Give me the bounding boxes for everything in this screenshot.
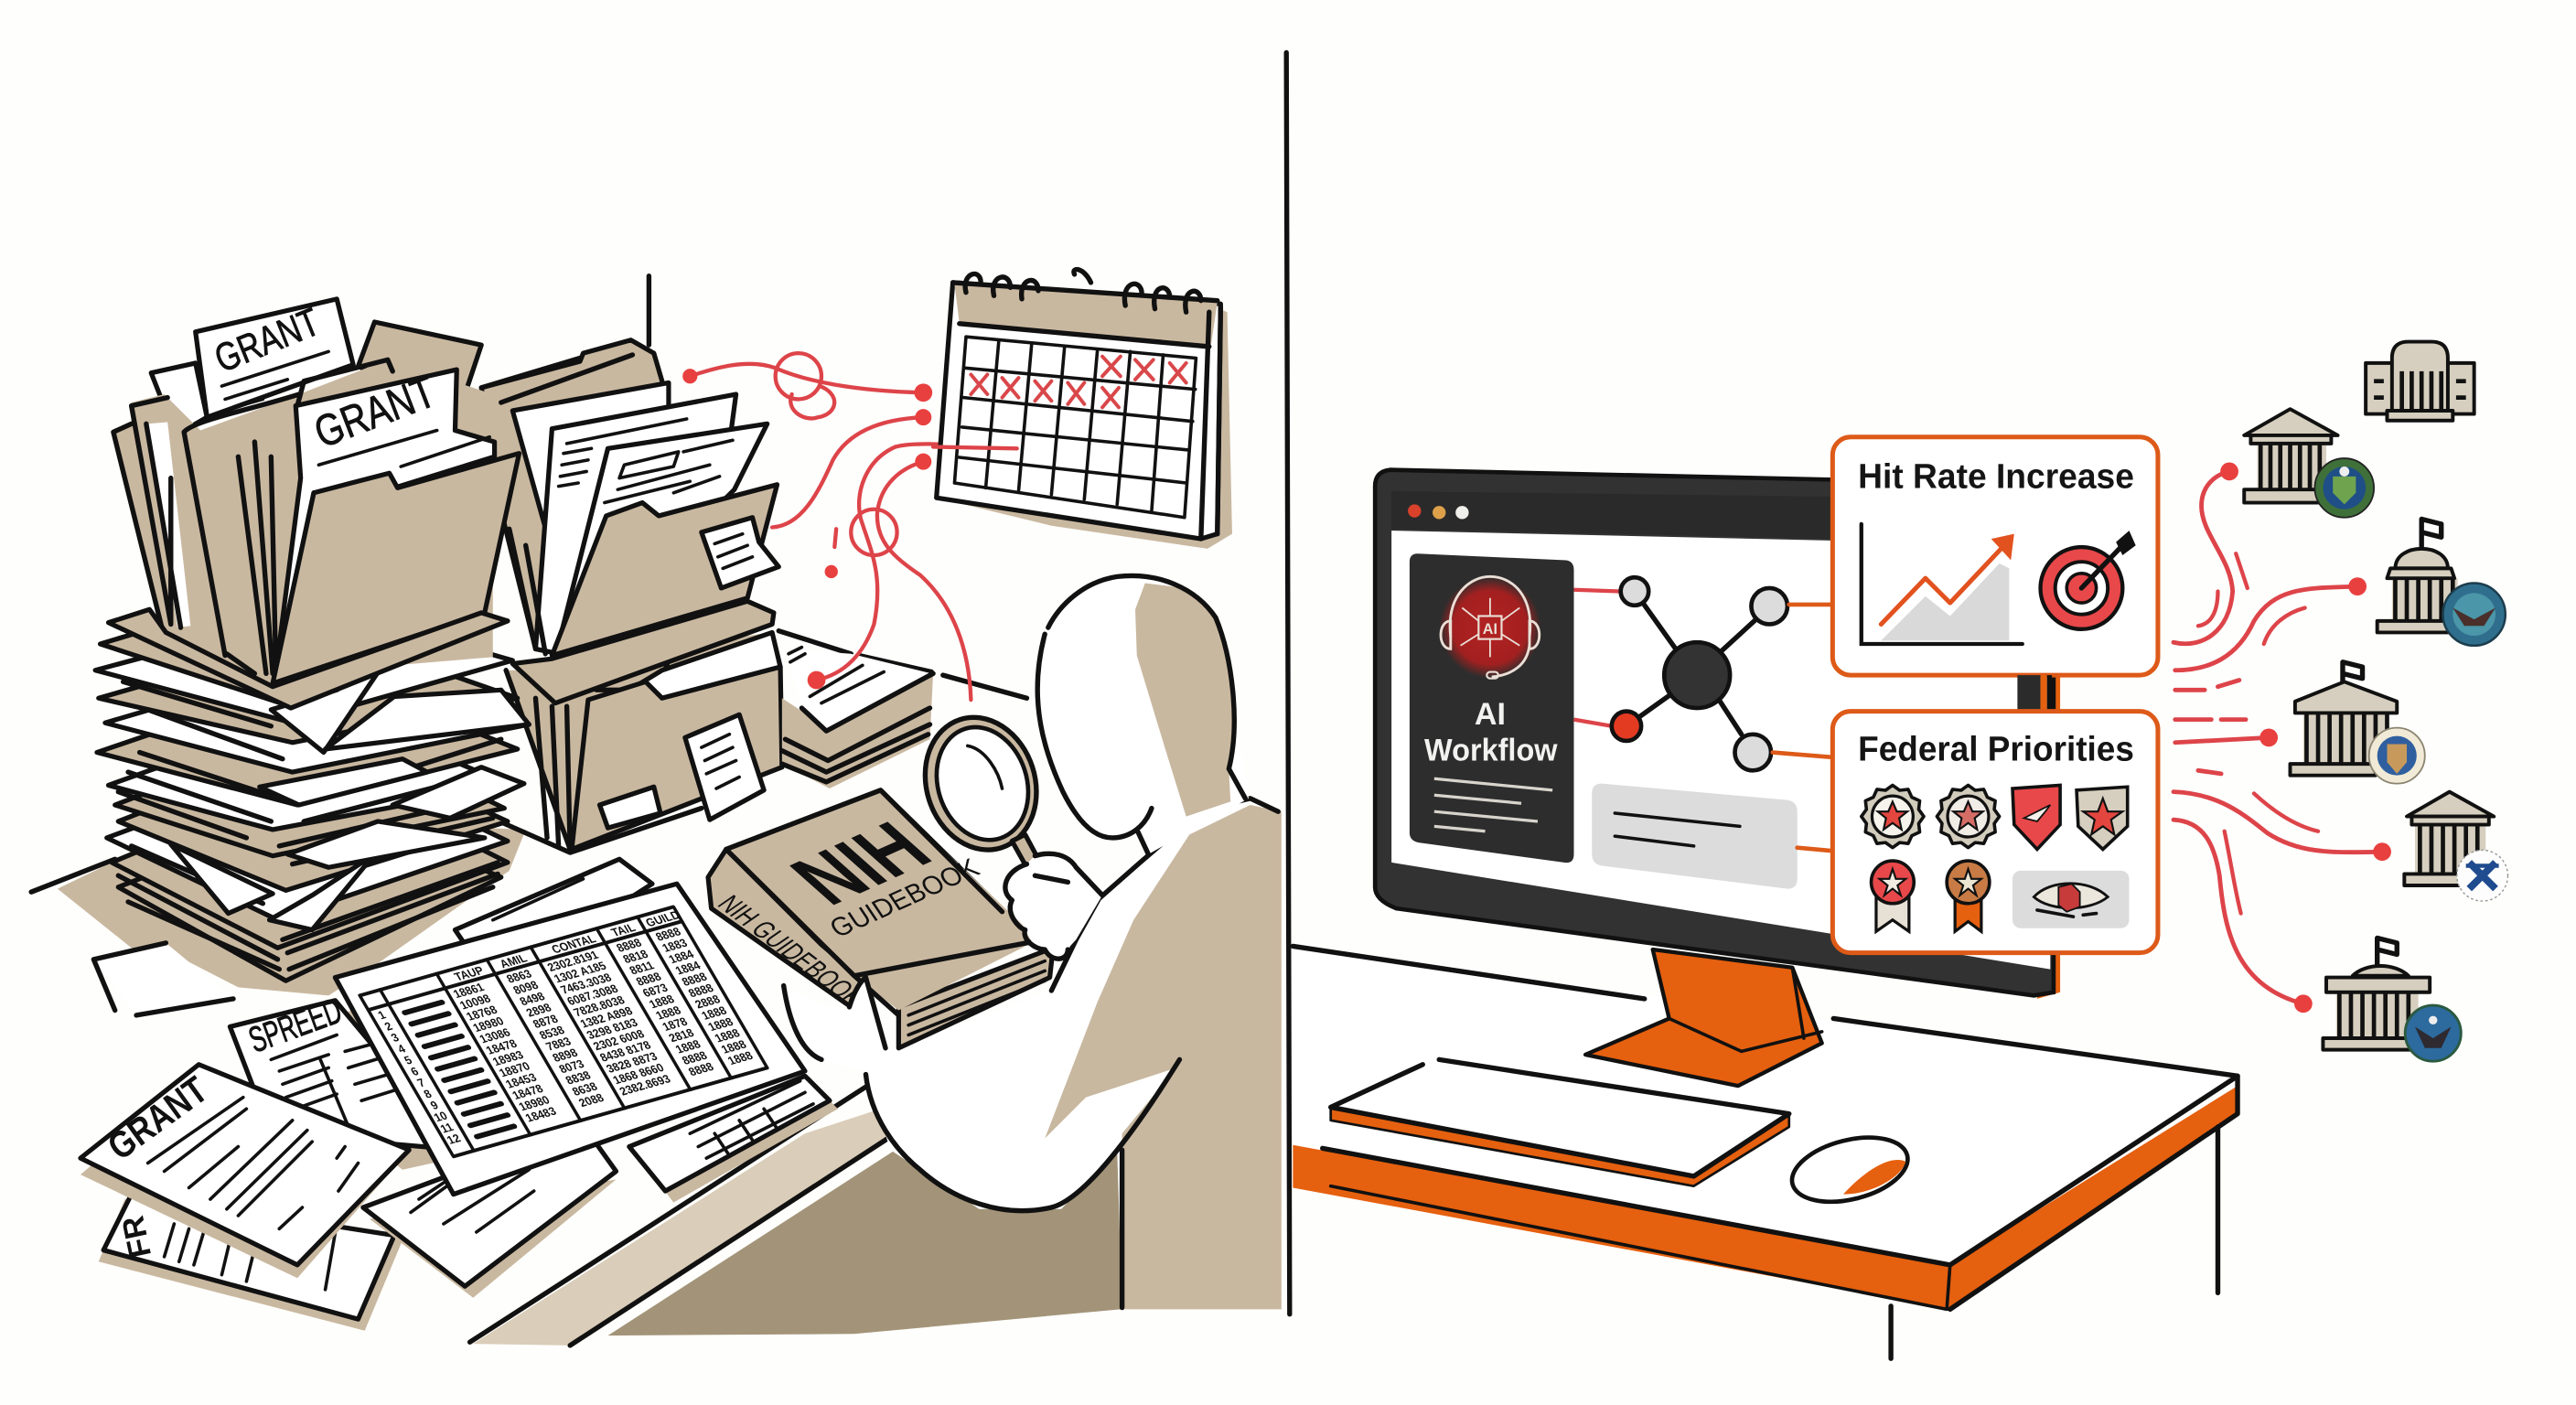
main spreadsheet: 5 xyxy=(402,1054,414,1067)
browser title bar xyxy=(1391,491,2054,543)
NIH guidebook xyxy=(708,790,1053,1048)
paper stack xyxy=(95,575,529,981)
main spreadsheet: 2 xyxy=(382,1020,395,1034)
grant sheet 1 xyxy=(196,299,353,417)
main spreadsheet: 8 xyxy=(422,1088,435,1101)
AI workflow label: AI xyxy=(1475,697,1506,732)
main spreadsheet: 18483 xyxy=(523,1105,559,1125)
main spreadsheet: 1888 xyxy=(706,1015,735,1034)
main spreadsheet: 18768 xyxy=(464,1003,499,1024)
main spreadsheet: 3828 8873 xyxy=(604,1050,660,1076)
desk shadow under stack xyxy=(58,821,526,995)
person's torso and arm xyxy=(865,799,1282,1309)
magnifying glass xyxy=(908,702,1053,882)
main spreadsheet: 8073 xyxy=(557,1057,586,1076)
main spreadsheet: 8498 xyxy=(518,990,547,1008)
agency icon: defense dome xyxy=(2377,520,2506,646)
grey eye badge xyxy=(2012,871,2130,928)
hand under book xyxy=(784,978,887,1071)
main spreadsheet: 7883 xyxy=(543,1035,574,1053)
agency icon: top building xyxy=(2366,342,2474,421)
spreadsheet sheet SPREED xyxy=(230,991,493,1170)
spreadsheet sheet SPREED: SPREED xyxy=(243,991,347,1061)
AI headset icon: AI xyxy=(1483,621,1497,638)
main spreadsheet: 6 xyxy=(408,1065,421,1078)
main spreadsheet: 7463.3038 xyxy=(558,971,614,997)
main spreadsheet: 2898 xyxy=(524,1002,553,1020)
main spreadsheet: TAUP xyxy=(452,964,486,983)
shield red xyxy=(2012,785,2060,849)
main spreadsheet: 8888 xyxy=(634,971,663,989)
desk edge lines xyxy=(31,276,1026,892)
screen xyxy=(1391,531,2050,970)
red line into calendar xyxy=(933,446,1017,448)
orange connectors to cards xyxy=(1773,605,1833,851)
seal: defense blue xyxy=(2405,1005,2461,1061)
connectors from AI card xyxy=(1573,590,1620,726)
sheet FR xyxy=(99,1195,402,1331)
main spreadsheet: 1 xyxy=(376,1009,388,1022)
main spreadsheet: 1888 xyxy=(713,1026,742,1045)
heading: Federal Priorities xyxy=(1858,730,2134,768)
main spreadsheet: 18980 xyxy=(517,1093,553,1113)
seal badge 2 xyxy=(1937,785,2000,848)
main spreadsheet: 18453 xyxy=(503,1071,539,1091)
main spreadsheet: 18870 xyxy=(497,1060,532,1079)
binder rings xyxy=(965,270,1201,312)
main spreadsheet: 8888 xyxy=(614,937,644,955)
agency icon: seal building five xyxy=(2323,938,2461,1061)
small paper pile xyxy=(782,648,933,788)
seal: defense xyxy=(2443,584,2506,646)
main spreadsheet: 18478 xyxy=(484,1037,520,1057)
calendar grid xyxy=(954,337,1196,518)
mouse xyxy=(1786,1127,1915,1213)
book title: NIH xyxy=(771,808,950,919)
main spreadsheet: 8888 xyxy=(680,1049,710,1067)
main spreadsheet: 8438 8178 xyxy=(597,1039,653,1065)
main spreadsheet: 8838 xyxy=(564,1068,593,1087)
NIH guidebook: NIH GUIDEBOOK xyxy=(711,891,872,1012)
grant sheet on desk: GRANT xyxy=(100,1068,215,1168)
main spreadsheet: 1382 A898 xyxy=(578,1004,635,1031)
main spreadsheet: 1888 xyxy=(653,1004,683,1023)
main spreadsheet: 8811 xyxy=(628,959,657,977)
heading: Hit Rate Increase xyxy=(1858,456,2134,495)
sheet middle xyxy=(363,1117,616,1298)
seal: science xyxy=(2369,728,2425,784)
main spreadsheet: 18478 xyxy=(510,1082,545,1102)
grant sheet on desk xyxy=(80,1065,409,1278)
main spreadsheet: 1888 xyxy=(699,1004,729,1023)
deadline X marks xyxy=(971,357,1186,407)
main spreadsheet: 4 xyxy=(395,1043,408,1056)
main spreadsheet: 8888 xyxy=(686,981,716,1000)
monitor stand xyxy=(1585,949,1822,1086)
monitor xyxy=(1375,470,2060,999)
main spreadsheet: 18861 xyxy=(451,981,487,1001)
scattered desk papers xyxy=(80,859,838,1331)
main spreadsheet: 1888 xyxy=(719,1038,749,1056)
right folder group xyxy=(481,340,778,703)
seal: X xyxy=(2457,850,2507,901)
agency icon: seal building four xyxy=(2404,792,2507,901)
main spreadsheet: 1868 8660 xyxy=(611,1061,666,1087)
main spreadsheet: 8863 xyxy=(504,968,534,986)
main spreadsheet: 2382.8693 xyxy=(617,1072,673,1098)
sticky note xyxy=(702,518,778,588)
main spreadsheet: GUILD xyxy=(643,908,682,929)
main spreadsheet: 6087.3088 xyxy=(564,982,620,1008)
panel: AI workflow side xyxy=(1293,342,2507,1358)
main spreadsheet: 8888 xyxy=(653,925,683,943)
right desk xyxy=(1293,946,2238,1358)
main spreadsheet: 10 xyxy=(432,1110,450,1124)
main spreadsheet: 8888 xyxy=(680,971,710,989)
monitor strip between cards xyxy=(2017,675,2052,712)
card: Hit Rate Increase xyxy=(1832,437,2158,675)
panel: manual research side xyxy=(31,52,1290,1346)
AI workflow label xyxy=(1424,697,1558,768)
network graph xyxy=(1612,577,1787,770)
sheet FR: FR xyxy=(115,1213,158,1260)
seal: energy xyxy=(2314,458,2374,518)
main spreadsheet: 13086 xyxy=(478,1026,513,1046)
front folder xyxy=(273,454,520,683)
person's head xyxy=(1037,575,1249,854)
main spreadsheet: 1888 xyxy=(673,1037,703,1056)
main spreadsheet xyxy=(335,884,805,1195)
main spreadsheet: 3298 8183 xyxy=(585,1016,640,1042)
main spreadsheet: 8638 xyxy=(570,1080,600,1099)
main spreadsheet: 7 xyxy=(415,1077,427,1089)
loose sheets in stack xyxy=(171,660,529,929)
AI headset icon xyxy=(1439,576,1541,679)
lower cabinet folder xyxy=(499,632,782,853)
main spreadsheet: 2888 xyxy=(692,992,723,1011)
main spreadsheet: 8898 xyxy=(550,1046,580,1065)
folder base xyxy=(109,609,508,708)
grant sheet 2: GRANT xyxy=(308,367,442,458)
main spreadsheet: 8818 xyxy=(621,948,650,966)
main spreadsheet: 2302.8191 xyxy=(545,949,601,974)
seal badge 1 xyxy=(1862,785,1924,848)
line chart xyxy=(1862,524,2023,644)
front folder with sticky note xyxy=(552,485,777,656)
main spreadsheet: 1302 A185 xyxy=(552,960,608,985)
main spreadsheet: 12 xyxy=(445,1132,463,1147)
grant sheet 1: GRANT xyxy=(209,300,326,381)
hand holding magnifier xyxy=(1005,853,1102,959)
main spreadsheet: 2302 6008 xyxy=(591,1027,647,1053)
label slip xyxy=(600,787,660,828)
NIH guidebook: GUIDEBOOK xyxy=(824,853,985,943)
small spreadsheet under main xyxy=(629,1076,838,1203)
AI workflow card xyxy=(1410,553,1573,863)
main spreadsheet: 2088 xyxy=(576,1091,606,1110)
main spreadsheet: 1884 xyxy=(673,959,703,977)
main spreadsheet: 18980 xyxy=(470,1014,506,1035)
target icon xyxy=(2041,531,2136,629)
main spreadsheet: 7828.8038 xyxy=(572,993,627,1019)
agency icon: energy xyxy=(2244,409,2374,518)
main spreadsheet: 8888 xyxy=(686,1060,716,1078)
main spreadsheet: 1883 xyxy=(660,937,690,955)
main spreadsheet: 3 xyxy=(389,1031,402,1045)
main spreadsheet: 1884 xyxy=(667,948,696,966)
agency icon: seal building three xyxy=(2291,662,2425,784)
main spreadsheet: 11 xyxy=(438,1121,456,1135)
main spreadsheet: 9 xyxy=(428,1099,441,1112)
grey text box xyxy=(1592,784,1798,889)
main spreadsheet: TAIL xyxy=(609,921,639,939)
ribbon badge orange xyxy=(1947,861,1990,931)
main spreadsheet: 1888 xyxy=(647,992,677,1011)
main spreadsheet: 8538 xyxy=(537,1024,567,1042)
main spreadsheet: 1888 xyxy=(725,1049,756,1067)
red tangled connectors xyxy=(682,353,1022,700)
note xyxy=(685,714,764,820)
main spreadsheet: 2818 xyxy=(667,1026,696,1045)
main spreadsheet: AMIL xyxy=(498,951,530,971)
main spreadsheet: 18983 xyxy=(490,1048,526,1068)
loose blank sheet xyxy=(93,943,233,1015)
red connector bundle xyxy=(2174,463,2391,1013)
main spreadsheet: 8098 xyxy=(510,979,541,997)
main spreadsheet: 10098 xyxy=(457,992,493,1012)
AI workflow label: Workflow xyxy=(1424,734,1558,768)
keyboard xyxy=(1331,1058,1789,1186)
calendar xyxy=(933,270,1232,549)
main spreadsheet: CONTAL xyxy=(549,932,598,956)
central divider xyxy=(1286,52,1290,1314)
bottom desk xyxy=(470,1067,1125,1346)
left folder group xyxy=(109,299,520,708)
card: Federal Priorities xyxy=(1832,712,2158,953)
main spreadsheet: 8878 xyxy=(531,1013,561,1031)
main spreadsheet: 1878 xyxy=(660,1015,690,1034)
rear sheet xyxy=(455,859,652,986)
shield tan xyxy=(2077,787,2128,849)
main spreadsheet: 6873 xyxy=(640,981,671,1000)
grant sheet 2 xyxy=(276,367,495,670)
ribbon badge red xyxy=(1872,861,1914,931)
